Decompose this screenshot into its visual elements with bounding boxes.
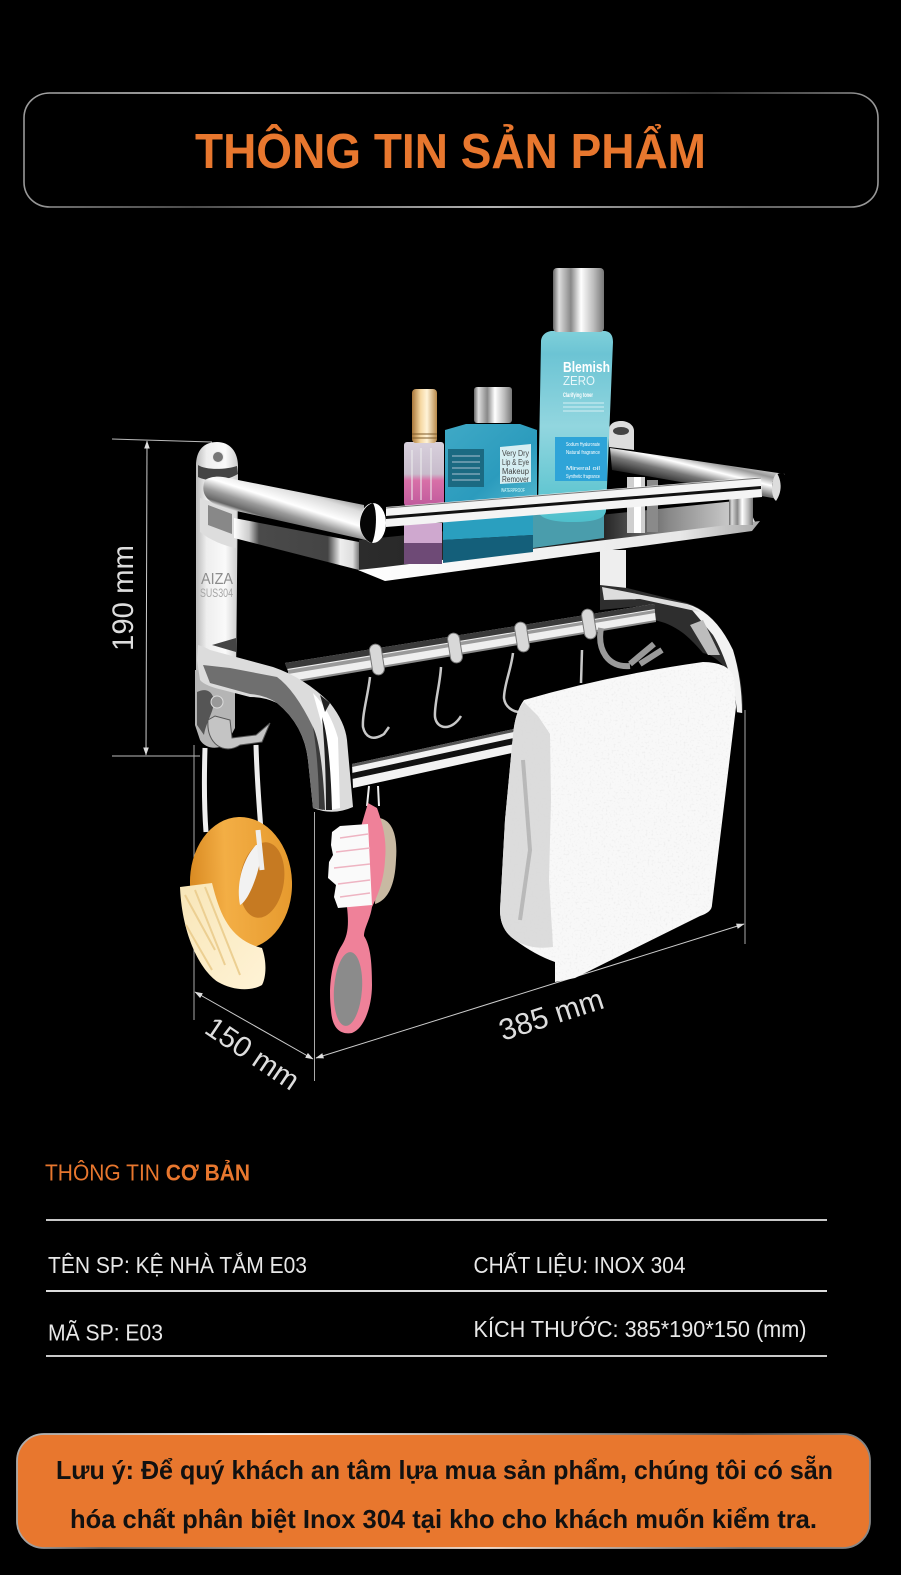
title banner bbox=[24, 93, 878, 207]
tall blue bottle: Blemish bbox=[563, 359, 610, 376]
product: lower towel frame bbox=[197, 585, 743, 812]
product: pink foot brush bbox=[328, 803, 396, 1033]
medium blue bottle: WATERPROOF bbox=[501, 488, 525, 494]
left wall plate: AIZA bbox=[201, 571, 233, 588]
dimension: depth 150 mm bbox=[194, 745, 314, 1097]
product: white towel bbox=[500, 662, 736, 982]
pumice stone bbox=[375, 818, 396, 904]
tall blue bottle: Natural fragrance bbox=[566, 450, 600, 456]
product: shelf rack bbox=[195, 421, 760, 748]
tube end cap bbox=[360, 503, 386, 543]
dimension: height 190 mm: 190 mm bbox=[107, 545, 140, 651]
size: KÍCH THƯỚC: 385*190*150 (mm) bbox=[474, 1316, 806, 1342]
upper rod bbox=[285, 604, 656, 683]
medium blue bottle: Remover bbox=[502, 475, 529, 484]
medium blue bottle: Makeup bbox=[502, 467, 530, 476]
left curved tube bbox=[197, 645, 353, 812]
tall blue bottle: Sodium Hyaluronate bbox=[566, 442, 600, 448]
reflections on tray bbox=[404, 508, 604, 564]
right curved tube bbox=[600, 585, 743, 713]
pink handle bbox=[330, 803, 386, 1033]
dimension: width 385 mm: 385 mm bbox=[495, 983, 608, 1048]
tall blue bottle: Synthetic fragrance bbox=[566, 474, 600, 480]
rod rings bbox=[369, 608, 597, 676]
dimension: height 190 mm bbox=[107, 439, 212, 756]
right wall plate bbox=[600, 421, 634, 598]
dimension: depth 150 mm: 150 mm bbox=[199, 1011, 305, 1097]
medium blue bottle: Lip & Eye bbox=[502, 458, 529, 467]
left arm tube bbox=[203, 477, 386, 543]
section heading: basic info: THÔNG TIN CƠ BẢN bbox=[45, 1158, 250, 1186]
tall blue bottle bbox=[538, 268, 613, 522]
dimension: width 385 mm bbox=[316, 710, 745, 1058]
product: hanging strings bbox=[204, 745, 379, 832]
front rail bbox=[386, 477, 762, 527]
product: bottles bbox=[404, 268, 613, 522]
callout: note bbox=[17, 1434, 870, 1548]
tray wall and base bbox=[200, 477, 760, 581]
info table bbox=[46, 1219, 827, 1357]
brush bristles bbox=[328, 824, 372, 908]
left wall plate bbox=[195, 442, 238, 748]
right wall hook bbox=[600, 628, 662, 666]
product code: MÃ SP: E03 bbox=[48, 1320, 163, 1346]
lower rod bbox=[352, 722, 548, 788]
callout: note: hóa chất phân biệt Inox 304 tại kho cho khách muốn kiểm tra. bbox=[70, 1504, 817, 1534]
medium blue bottle: Very Dry bbox=[502, 449, 529, 458]
tall blue bottle: ZERO bbox=[563, 373, 595, 388]
note text: Lưu ý: Để quý khách an tâm lựa mua sản phẩm, chúng tôi có sẵn bbox=[56, 1455, 833, 1485]
material: CHẤT LIỆU: INOX 304 bbox=[474, 1251, 686, 1278]
small perfume bottle bbox=[404, 389, 444, 506]
left wall hook bbox=[208, 696, 270, 749]
product: wooden bath brush bbox=[180, 815, 294, 989]
right arm tube bbox=[610, 448, 790, 501]
left wall plate: SUS304 bbox=[200, 588, 233, 600]
product name: TÊN SP: KỆ NHÀ TẮM E03 bbox=[48, 1251, 307, 1278]
tall blue bottle: Clarifying toner bbox=[563, 393, 593, 399]
product: front rail and arms bbox=[203, 448, 790, 543]
right support columns bbox=[627, 477, 645, 533]
S hooks bbox=[363, 650, 582, 738]
title text: THÔNG TIN SẢN PHẨM bbox=[195, 124, 706, 179]
medium blue bottle bbox=[445, 387, 537, 505]
dimension diagram bbox=[107, 268, 790, 1097]
metal file bbox=[331, 951, 365, 1027]
tall blue bottle: Mineral oil bbox=[566, 466, 600, 472]
